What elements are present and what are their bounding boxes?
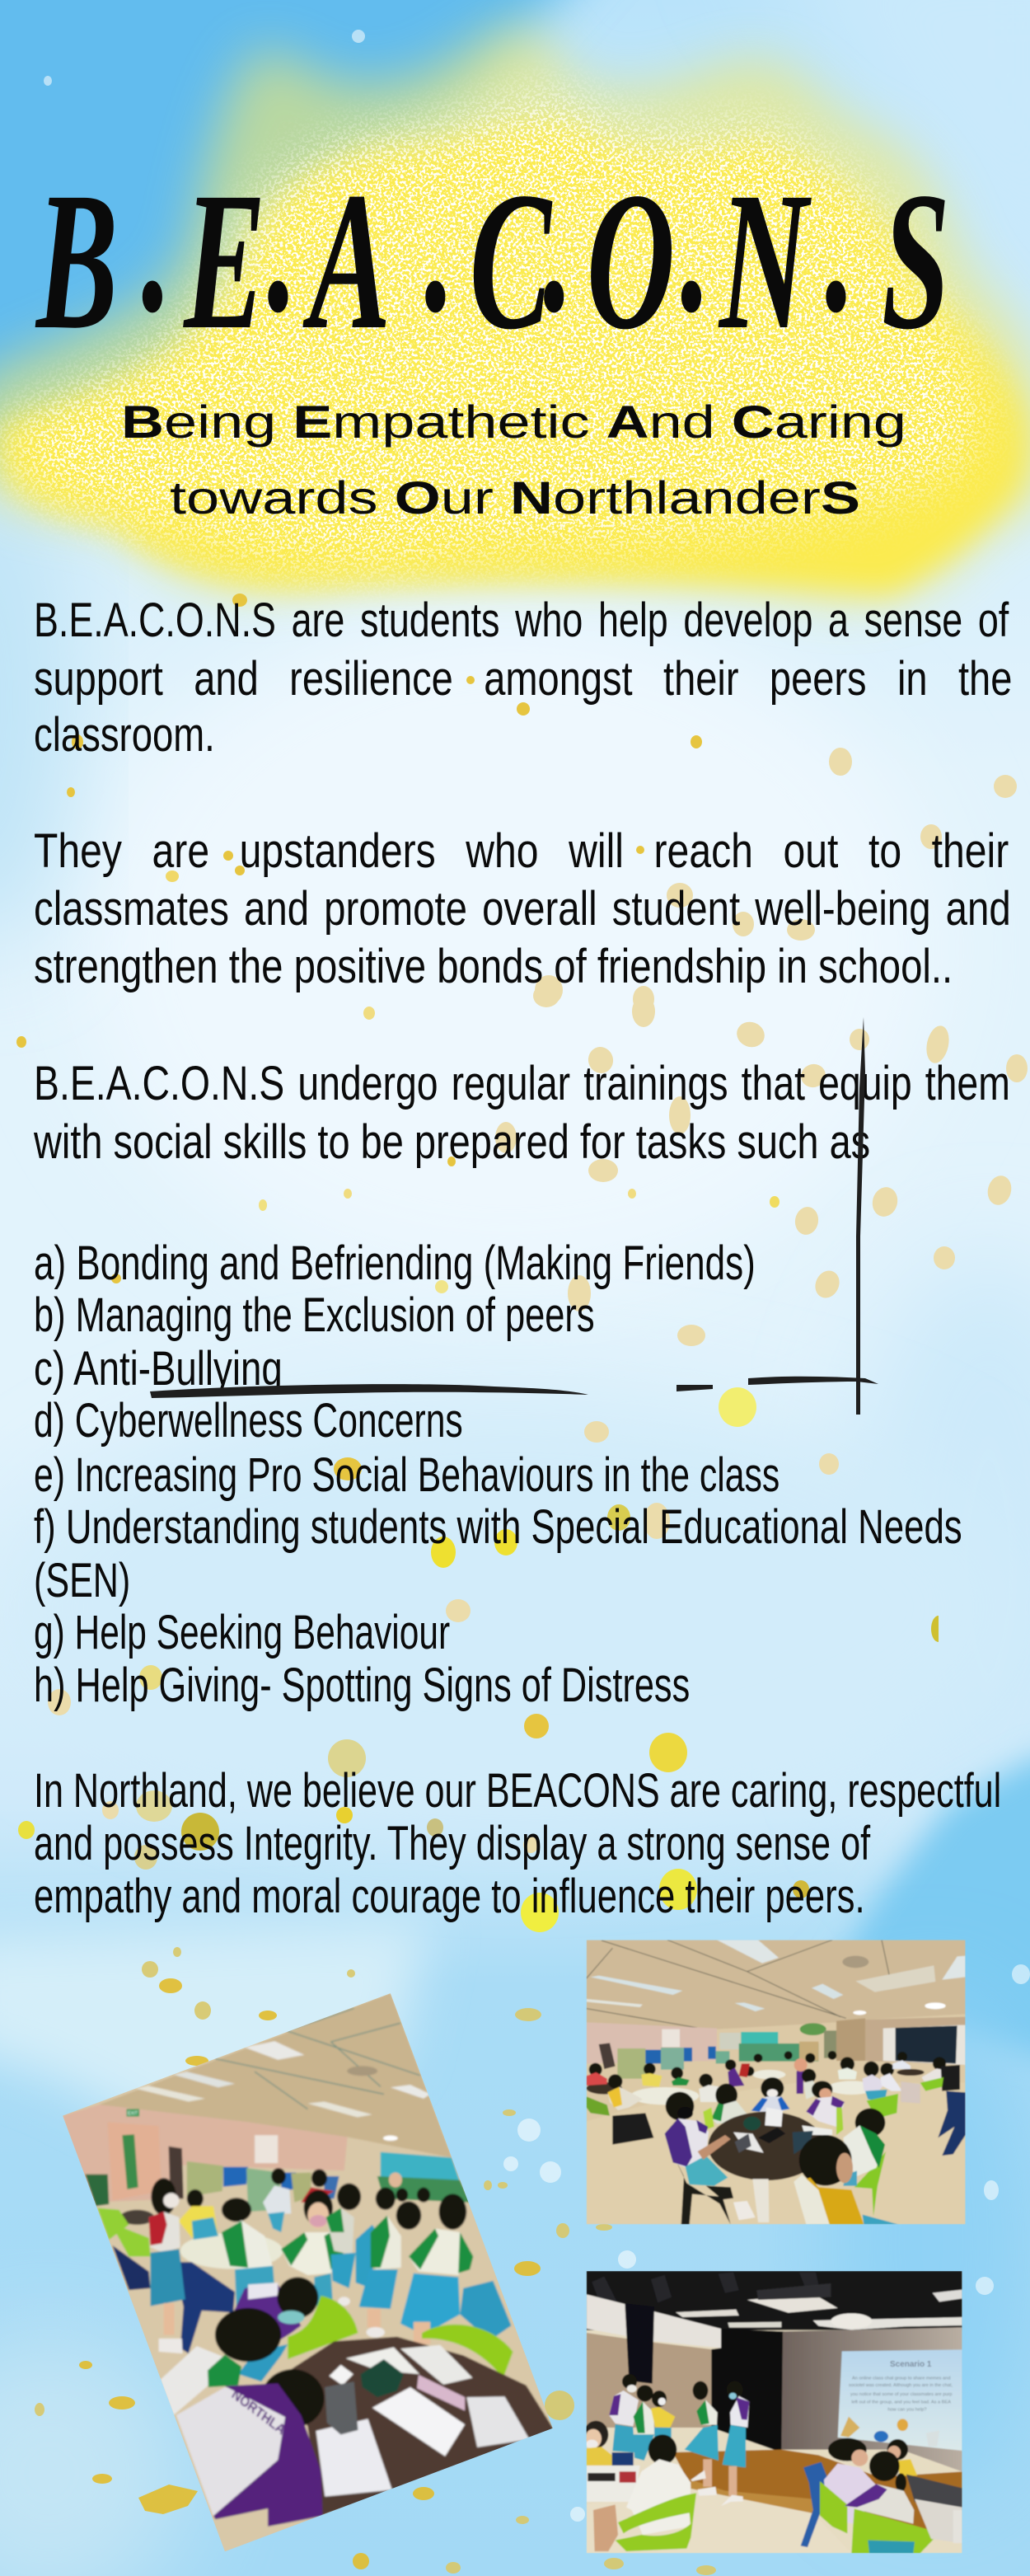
photo: role play on stage with Scenario 1 slide xyxy=(583,2271,962,2553)
projected slide: you notice that some of your classmates are purp xyxy=(850,2392,953,2397)
projected slide: An online class chat group to share memes and xyxy=(852,2377,950,2381)
paragraph: training: B.E.A.C.O.N.S undergo regular trainings that equip them xyxy=(34,1058,1010,1110)
back students xyxy=(187,2189,204,2208)
wall xyxy=(63,2104,348,2203)
projected slide: Scenario 1 xyxy=(890,2360,932,2369)
girl from behind with NORTHLAND shirt xyxy=(400,2194,512,2344)
second kneeling student xyxy=(161,2308,281,2415)
floor xyxy=(587,2489,851,2553)
black ceiling xyxy=(587,2271,962,2330)
girl in blue sleeves xyxy=(751,2077,789,2113)
central girl xyxy=(281,2190,344,2307)
paragraph: what BEACONS are: support and resilience amongst their peers in the xyxy=(34,653,1012,706)
wood wall xyxy=(587,2333,711,2428)
papers and cases on table xyxy=(733,2108,832,2154)
paragraph: in Northland xyxy=(34,1765,1001,1923)
boys in middle xyxy=(326,2184,421,2338)
list: training tasks a to h: c) Anti-Bullying xyxy=(34,1343,283,1396)
lime chairs xyxy=(288,2296,358,2359)
students on stage xyxy=(609,2374,749,2506)
paragraph: upstanders: strengthen the positive bonds of friendship in school.. xyxy=(34,941,953,993)
paragraph: training: with social skills to be prepared for tasks such as xyxy=(33,1116,870,1169)
subtitle xyxy=(121,396,906,523)
boy in green shirt on chair xyxy=(843,2109,886,2216)
projected slide: left out of the group, and you feel bad. As a BEA xyxy=(851,2400,951,2405)
panel: yellow speckled burst xyxy=(0,22,1030,602)
list: training tasks a to h: (SEN) xyxy=(34,1555,130,1607)
projected slide: sociotel was created. Although you are in the chat, xyxy=(849,2383,953,2388)
list: training tasks a to h: e) Increasing Pro Social Behaviours in the class xyxy=(34,1449,780,1502)
papers and pencil cases xyxy=(316,2345,530,2497)
brush strokes: crossed scratchy lines xyxy=(150,1017,878,1415)
projected slide: how can you help? xyxy=(887,2407,927,2412)
paragraph: training xyxy=(33,1058,1010,1169)
paragraph: in Northland: empathy and moral courage to influence their peers. xyxy=(34,1870,865,1923)
students right with lime chairs xyxy=(801,2438,962,2553)
photo: students in library (rotated) xyxy=(49,1978,569,2564)
stage floor xyxy=(673,2450,962,2541)
white soffit xyxy=(587,2294,721,2348)
boy foreground xyxy=(794,2135,898,2224)
left table xyxy=(587,2466,640,2502)
ceiling xyxy=(587,1940,966,2029)
list: training tasks a to h: f) Understanding students with Special Educational Needs xyxy=(34,1501,962,1554)
right wall xyxy=(781,2327,962,2471)
photo: students in library (rotated): EXIT xyxy=(128,2111,138,2116)
ceiling xyxy=(99,1993,452,2157)
student back view near table xyxy=(222,2198,274,2311)
paragraph: what BEACONS are xyxy=(34,594,1012,762)
list: training tasks a to h xyxy=(34,1237,962,1712)
list: training tasks a to h: g) Help Seeking Behaviour xyxy=(34,1607,450,1659)
subtitle line 1: Being Empathetic And Caring xyxy=(121,396,906,448)
floor xyxy=(587,2083,966,2224)
girl seated left with mask xyxy=(583,2421,634,2466)
green and blue furniture xyxy=(187,2161,223,2197)
yellow shirt student left xyxy=(607,2074,643,2110)
kneeling girl purple xyxy=(232,2277,318,2381)
paragraph: upstanders xyxy=(34,825,1011,993)
paragraph: upstanders: classmates and promote overall student well-being and xyxy=(34,883,1011,936)
foreground girl writing: NORTHLAND xyxy=(229,2386,303,2450)
girl in purple foreground xyxy=(665,2092,756,2224)
list: training tasks a to h: a) Bonding and Befriending (Making Friends) xyxy=(34,1237,756,1290)
paragraph: in Northland: and possess Integrity. They display a strong sense of xyxy=(34,1818,870,1870)
girl in red shirt xyxy=(149,2178,185,2353)
back furniture xyxy=(617,2048,645,2079)
black curtains xyxy=(625,2303,654,2384)
back shelves and screen xyxy=(741,2032,778,2043)
background students xyxy=(587,2051,960,2104)
list: training tasks a to h: d) Cyberwellness Concerns xyxy=(34,1395,463,1448)
foreground girl writing xyxy=(176,2369,324,2535)
subtitle line 2: towards Our Northlander S xyxy=(170,472,860,523)
tables and chairs left xyxy=(120,2210,154,2225)
dark round table xyxy=(278,2337,555,2516)
photo: class at tables xyxy=(587,1940,966,2224)
large dark table xyxy=(708,2112,825,2180)
list: training tasks a to h: h) Help Giving- Spotting Signs of Distress xyxy=(34,1659,690,1712)
girl in green sleeves xyxy=(703,2084,748,2129)
back screens and shelves xyxy=(381,2152,460,2182)
heading: B.E.A.C.O.N.S title: B.E.A.C.O.N.S xyxy=(35,134,950,371)
decorative dots: tan ellipses xyxy=(48,748,1028,1870)
paragraph: what BEACONS are: classroom. xyxy=(34,709,215,762)
decorative dots: gold and yellow xyxy=(16,594,939,1932)
girl in purple sleeves xyxy=(806,2081,845,2135)
small tables xyxy=(630,2087,699,2104)
blackboard xyxy=(883,2025,966,2065)
paragraph: upstanders: They are upstanders who will reach out to their xyxy=(34,825,1009,878)
lime and blue chairs right xyxy=(867,2094,898,2119)
boy in white shirt with lime chair xyxy=(593,2434,696,2551)
back wall xyxy=(587,2022,717,2063)
list: training tasks a to h: b) Managing the Exclusion of peers xyxy=(34,1289,595,1342)
projected slide xyxy=(838,2349,962,2451)
